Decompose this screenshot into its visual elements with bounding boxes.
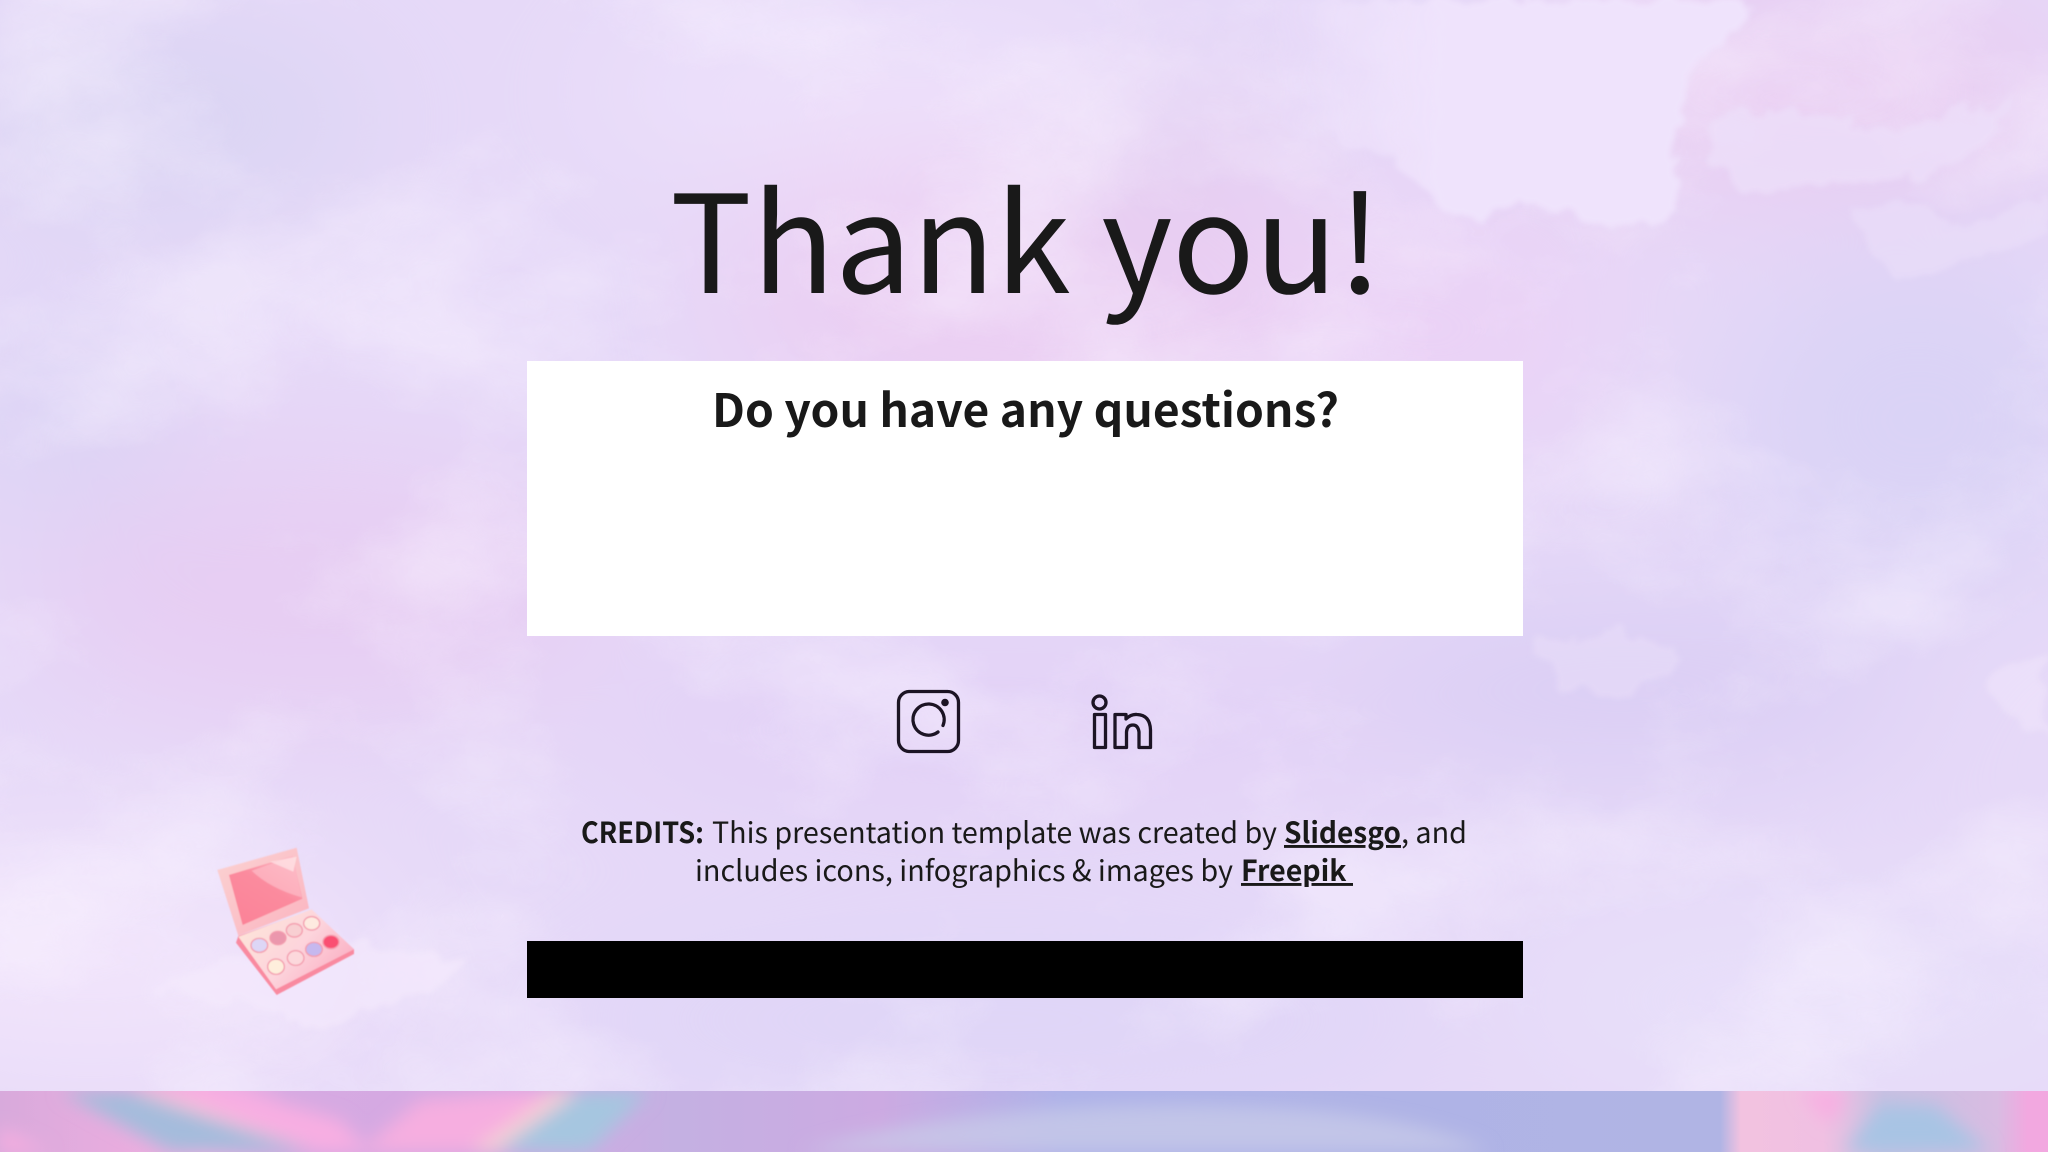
title: Thank you!	[670, 136, 1382, 333]
black bar	[527, 941, 1523, 998]
credits text: Slidesgo	[1284, 810, 1401, 852]
credits text: includes icons, infographics & images by	[695, 848, 1233, 890]
credits text: This presentation template was created by	[712, 810, 1277, 852]
panel: questions	[527, 361, 1523, 636]
credits text: CREDITS:	[581, 810, 704, 852]
credits text: Freepik	[1241, 848, 1353, 890]
icon: eyeshadow palette	[217, 848, 354, 995]
icon: instagram	[898, 692, 958, 752]
bottom iridescent strip	[0, 1091, 2048, 1152]
heading: questions: Do you have any questions?	[712, 375, 1339, 441]
credits text	[581, 810, 1467, 890]
credits text: , and	[1401, 810, 1467, 852]
icon: linkedin	[1093, 696, 1150, 748]
